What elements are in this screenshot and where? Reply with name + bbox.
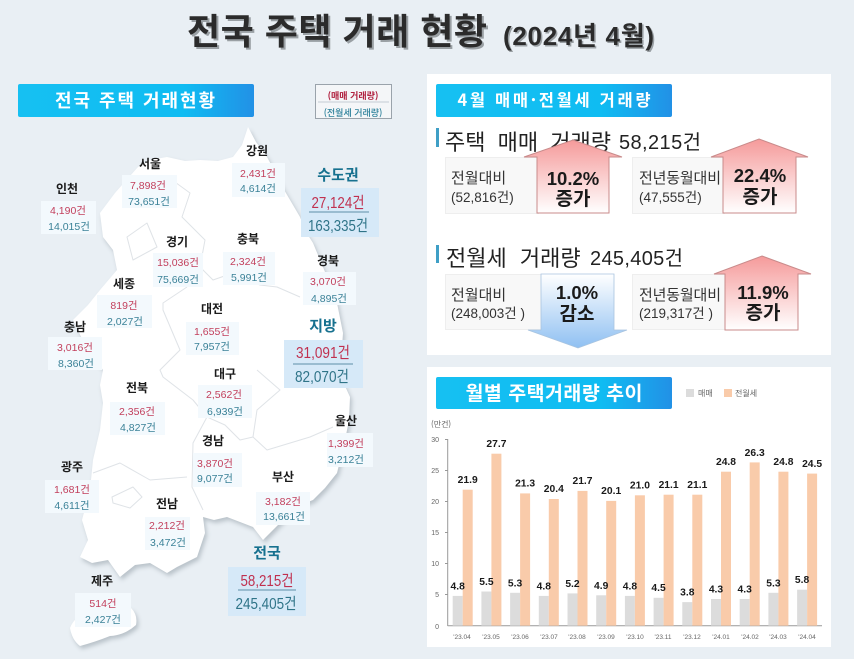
region: Jeonbuk: 전북 [126,379,148,396]
region: Seoul [122,155,177,208]
bar chart: 4.8 [537,582,551,592]
bar chart: 24.8 [773,457,794,468]
card: rent month on month: (248,003건 ) [451,306,525,321]
card: sale month on month: 전월대비 [451,170,506,187]
legend: sale and rent: (전월세 거래량) [324,106,382,119]
bar chart: 21.0 [630,480,650,492]
region: Gyeongnam [193,432,242,487]
arrow: up 10.2 percent: 증가 [556,184,590,211]
arrow: down 1.0 percent [528,274,627,348]
arrow: up 11.9 percent: 증가 [746,298,780,325]
bar chart: 21.1 [687,480,708,491]
title: (2024년 4월) [503,21,654,51]
bar chart: '23.04 [453,634,471,641]
region: Gwangju: 4,611건 [54,500,90,512]
arrow: up 22.4 percent: 22.4% [734,165,786,186]
region: Gyeongbuk: 경북 [317,252,339,269]
region: Chungnam: 충남 [64,318,86,335]
Jeju island [70,608,136,646]
region: Gyeonggi: 경기 [166,233,188,250]
bar chart: 5.5 [479,577,494,588]
region: Gyeongnam: 경남 [202,432,224,449]
bar chart: 4.3 [738,584,752,596]
region: Daejeon [186,300,239,355]
region: Chungbuk: 2,324건 [230,256,266,268]
region: Jeju: 제주 [91,572,113,589]
sub-heading: rent volume [436,241,683,273]
region: Jeju: 514건 [89,598,117,610]
bar chart: '23.10 [626,634,644,641]
card: rent year on year: 전년동월대비 [639,287,721,304]
region: Gyeonggi: 15,036건 [157,257,199,269]
region: Incheon [41,180,96,234]
region: Daegu: 대구 [214,365,236,382]
total: nationwide [228,542,306,616]
bar chart: 27.7 [486,439,507,450]
total: capital area: 163,335건 [308,217,368,235]
arrow: up 22.4 percent: 증가 [743,182,777,209]
total: provinces: 31,091건 [296,344,350,362]
region: Gangwon [232,142,285,197]
panel: April sale and rent volume [427,74,831,355]
region: Gwangju: 광주 [61,458,83,475]
region: Ulsan: 울산 [335,412,357,429]
bar chart: '23.09 [597,634,615,641]
region: Chungbuk [223,230,275,285]
bar chart: 4.3 [709,584,723,596]
title: (2024년 4월) [504,22,656,52]
title: 전국 주택 거래 현황 [189,5,489,57]
panel: national map [18,84,392,646]
bar chart: 30 [431,437,439,444]
region: Seoul: 73,651건 [128,196,170,208]
heading: April volume [436,84,672,117]
bar chart: 21.7 [572,476,593,487]
arrow: up 10.2 percent: 10.2% [547,168,599,189]
total: capital area: 27,124건 [312,194,364,212]
bar chart: 24.5 [802,459,822,470]
region: Gangwon: 2,431건 [240,168,276,180]
panel: monthly trend [427,367,831,647]
title: 전국 주택 거래 현황 [187,3,487,55]
chart legend: 전월세 [735,388,757,399]
bar chart: 24.8 [716,457,736,468]
bar chart: 5.3 [508,578,523,590]
region: Seoul: 서울 [139,155,161,172]
region: Busan: 13,661건 [263,511,305,523]
arrow: up 11.9 percent: 11.9% [737,282,789,303]
region: Chungnam: 3,016건 [57,342,93,354]
bar chart: 5.8 [795,575,810,586]
region: Daejeon: 1,655건 [194,326,230,338]
region: Seoul: 7,898건 [130,180,166,192]
region: Sejong [97,275,152,328]
region: Daegu: 2,562건 [206,389,242,401]
card: sale month on month: (52,816건) [451,190,514,205]
bar chart: '23.05 [482,634,500,641]
total: capital area [301,164,379,237]
legend: sale and rent [316,84,392,119]
region: Ulsan [327,412,373,467]
region: Daegu [198,365,252,418]
region: Gyeongbuk: 3,070건 [310,276,346,288]
card: sale year on year: 전년동월대비 [639,170,721,187]
total: nationwide: 전국 [253,542,281,563]
heading: monthly trend: 월별 주택거래량 추이 [466,377,642,406]
bar chart: '24.01 [712,634,730,641]
card: sale year on year [632,158,724,214]
bar chart: 5 [435,592,439,599]
region: Gangwon: 4,614건 [240,183,276,195]
region: Ulsan: 1,399건 [328,438,364,450]
sub-heading: sale volume: 주택 매매 거래량 [445,125,611,157]
bar chart: '23.06 [511,634,529,641]
region: Jeonbuk: 4,827건 [120,422,156,434]
total: provinces: 지방 [309,315,337,336]
sub-heading: sale volume: 58,215건 [619,131,701,154]
region: Jeonnam: 전남 [156,495,178,512]
bar chart: 21.9 [458,475,478,486]
sub-heading: rent volume: 전월세 거래량 [446,241,581,273]
bar chart: 5.3 [766,578,781,590]
chart legend: 매매 [698,388,713,399]
region: Busan [256,468,310,525]
region: Ulsan: 3,212건 [328,454,364,466]
region: Jeonbuk [110,379,165,435]
bar chart [431,437,822,641]
region: Jeju: 2,427건 [85,614,121,626]
bar chart: '23.07 [540,634,558,641]
region: Jeonnam: 3,472건 [150,537,186,549]
card: rent year on year: (219,317건 ) [639,306,713,321]
total: nationwide: 245,405건 [236,595,296,613]
unit label: (만건) [431,419,451,430]
bar chart: '23.08 [568,634,586,641]
region: Busan: 부산 [272,468,294,485]
region: Incheon: 4,190건 [50,205,86,217]
region: Sejong: 세종 [113,275,135,292]
bar chart: 20.4 [544,484,564,495]
bar chart: '24.02 [741,634,759,641]
bar chart: 25 [431,468,439,475]
region: Chungnam [48,318,102,370]
bar chart: 4.8 [451,582,465,592]
bar chart: '24.03 [769,634,787,641]
bar chart: 5.2 [565,579,580,590]
bar chart: 15 [431,530,439,537]
region: Chungbuk: 충북 [237,230,259,247]
total: provinces [284,315,363,388]
heading: national transactions [18,84,254,117]
region: Daejeon: 대전 [201,300,223,317]
region: Gwangju [45,458,99,513]
region: Gyeonggi [153,233,203,287]
bar chart: 20.1 [601,486,621,497]
heading: April volume: 4월 매매·전월세 거래량 [458,87,650,111]
arrow: up 11.9 percent [714,256,811,330]
region: Daejeon: 7,957건 [194,341,230,353]
bar chart: 0 [435,624,439,631]
title [187,3,656,57]
arrow: up 10.2 percent [524,140,622,213]
legend: sale and rent: (매매 거래량) [328,89,378,102]
total: nationwide: 58,215건 [240,572,294,590]
arrow: down 1.0 percent: 감소 [560,299,594,326]
region: Gyeongbuk: 4,895건 [311,293,347,305]
total: provinces: 82,070건 [295,368,349,386]
bar chart: 21.1 [659,480,679,491]
card: sale year on year: (47,555건) [639,190,702,205]
region: Chungnam: 8,360건 [58,358,94,370]
region: Incheon: 인천 [56,180,78,197]
bar chart: 26.3 [745,448,765,459]
region: Gangwon: 강원 [246,142,268,159]
bar chart: 20 [431,499,439,506]
bar chart: 3.8 [680,588,695,598]
heading: monthly trend [436,377,672,409]
bar chart: 21.3 [515,478,535,490]
bar chart: '23.12 [683,634,701,641]
region: Incheon: 14,015건 [48,221,90,233]
bar chart: 4.9 [594,581,609,592]
region: Busan: 3,182건 [265,496,301,508]
region: Jeonnam: 2,212건 [149,520,185,532]
sub-heading: sale volume [436,125,701,157]
region: Jeonnam [145,495,190,550]
bar chart: '23.11 [654,634,672,641]
chart legend [686,388,757,399]
region: Gyeongnam: 3,870건 [197,458,233,470]
region: Gyeonggi: 75,669건 [157,274,199,286]
region: Jeju [75,572,131,627]
region: Gyeongnam: 9,077건 [197,473,233,485]
region: Sejong: 819건 [110,300,138,312]
map of South Korea [70,127,350,646]
card: rent month on month: 전월대비 [451,287,506,304]
bar chart: 4.5 [651,583,666,594]
arrow: down 1.0 percent: 1.0% [556,282,598,303]
card: rent month on month [446,274,542,330]
region: Gyeongbuk [303,252,356,305]
region: Sejong: 2,027건 [107,316,143,328]
card: sale month on month [446,158,538,214]
bar chart: 4.8 [623,582,637,592]
bar chart: 10 [431,561,439,568]
sub-heading: rent volume: 245,405건 [590,247,683,270]
card: rent year on year [632,274,726,330]
total: capital area: 수도권 [317,164,359,185]
region: Chungbuk: 5,991건 [231,272,267,284]
region: Jeonbuk: 2,356건 [119,406,155,418]
region: Gwangju: 1,681건 [54,484,90,496]
region: Daegu: 6,939건 [207,406,243,418]
heading: national transactions: 전국 주택 거래현황 [55,87,215,113]
arrow: up 22.4 percent [711,139,808,213]
bar chart: '24.04 [798,634,816,641]
